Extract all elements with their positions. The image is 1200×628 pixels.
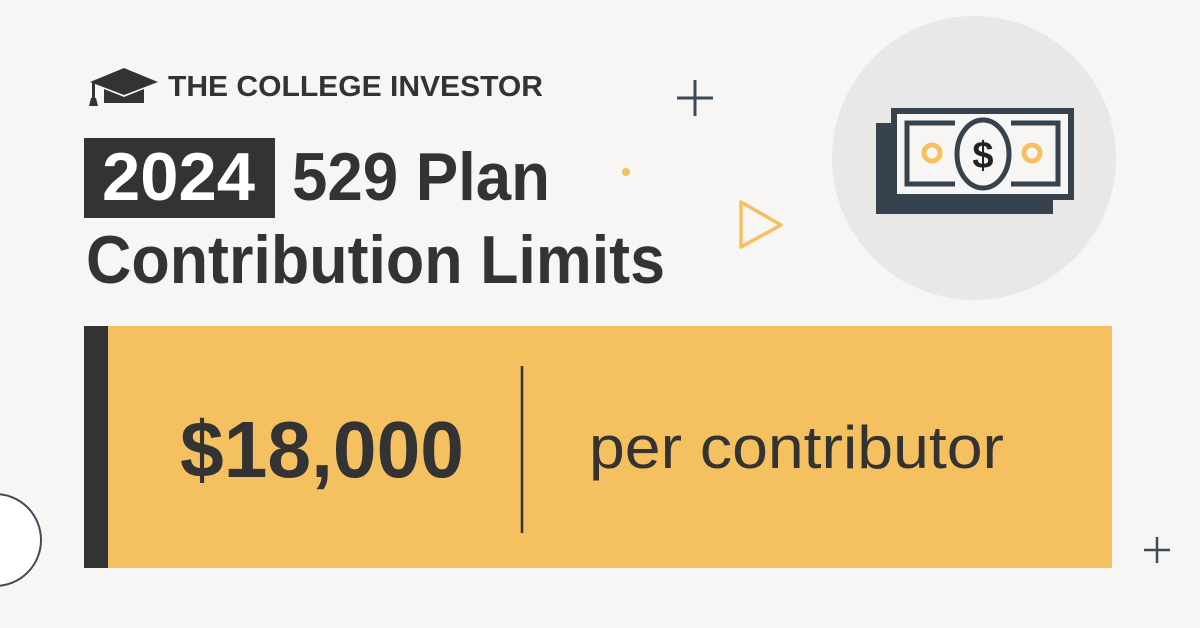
title: 2024 [102, 139, 255, 215]
logo [89, 68, 543, 106]
decoration: triangle [741, 202, 781, 247]
logo text: THE COLLEGE INVESTOR [168, 71, 543, 103]
label: per contributor: per contributor [589, 414, 1004, 481]
amount: $18,000 [180, 405, 464, 494]
year badge [84, 138, 275, 218]
icon: money bill in circle: $ [972, 135, 994, 177]
decoration: plus top [677, 80, 713, 116]
panel: contribution limit band [84, 326, 1112, 568]
decoration: left circle [0, 494, 41, 586]
title: Contribution Limits [86, 222, 665, 298]
title: 529 Plan [292, 139, 550, 215]
icon: graduation cap [89, 68, 158, 106]
icon: money bill in circle [832, 16, 1116, 300]
decoration: plus bottom right [1144, 537, 1170, 563]
title [84, 138, 665, 298]
decoration: yellow dot [622, 168, 630, 176]
